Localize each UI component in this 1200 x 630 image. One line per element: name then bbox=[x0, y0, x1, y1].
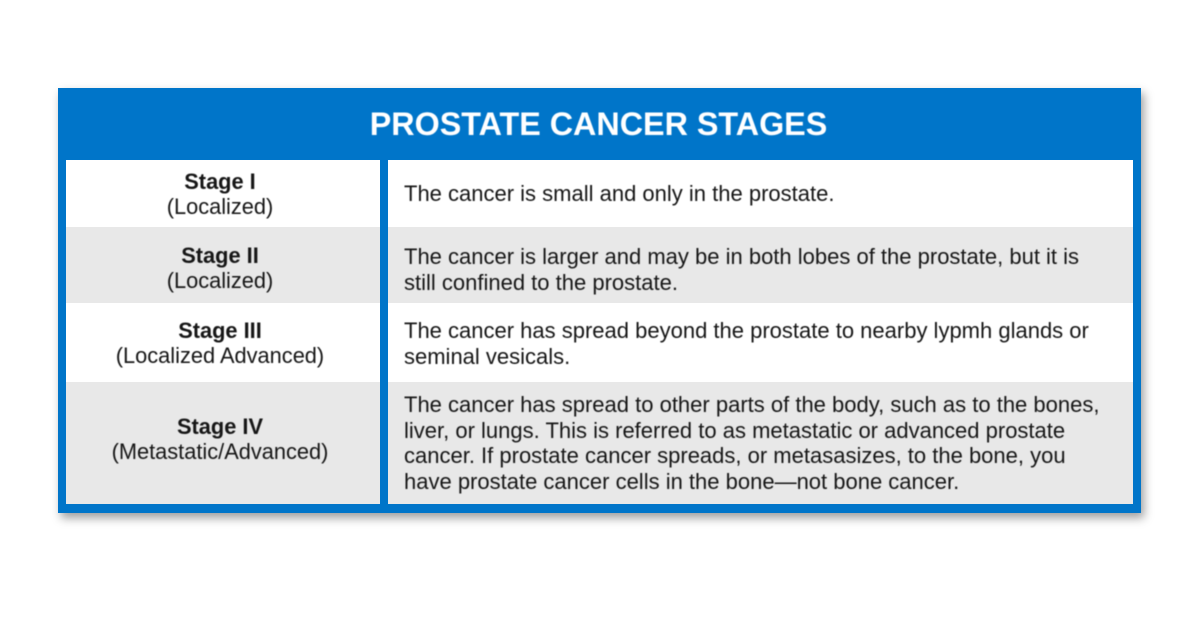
stage IV label: (Metastatic/Advanced) bbox=[112, 439, 328, 464]
stage III description: The cancer has spread beyond the prostate to nearby lypmh glands or bbox=[404, 318, 1089, 343]
stage II label: Stage II bbox=[181, 243, 259, 268]
stage II description: The cancer is larger and may be in both lobes of the prostate, but it is bbox=[404, 244, 1079, 269]
stage II description bbox=[388, 227, 1133, 303]
stage IV description: The cancer has spread to other parts of the body, such as to the bones, bbox=[404, 392, 1099, 417]
stage I label: (Localized) bbox=[167, 194, 273, 219]
stage I description: The cancer is small and only in the prostate. bbox=[404, 181, 834, 206]
stage IV label bbox=[66, 382, 380, 504]
stage II label bbox=[66, 227, 380, 303]
stage I label: Stage I bbox=[184, 169, 256, 194]
stage IV label: Stage IV bbox=[177, 414, 263, 439]
stage II label: (Localized) bbox=[167, 268, 273, 293]
stage IV description: cancer. If prostate cancer spreads, or metasasizes, to the bone, you bbox=[404, 443, 1066, 468]
stage III description: seminal vesicals. bbox=[404, 344, 570, 369]
stage II description: still confined to the prostate. bbox=[404, 270, 678, 295]
title: PROSTATE CANCER STAGES bbox=[370, 106, 827, 142]
stage I label bbox=[66, 160, 380, 227]
stage III label: Stage III bbox=[178, 318, 262, 343]
stage III label bbox=[66, 303, 380, 382]
stage III label: (Localized Advanced) bbox=[116, 343, 324, 368]
stage IV description: have prostate cancer cells in the bone—not bone cancer. bbox=[404, 469, 959, 494]
panel: prostate cancer stages table bbox=[58, 88, 1141, 513]
stage I description bbox=[388, 160, 1133, 227]
stage IV description: liver, or lungs. This is referred to as metastatic or advanced prostate bbox=[404, 418, 1065, 443]
stage IV description bbox=[388, 382, 1133, 504]
stage III description bbox=[388, 303, 1133, 382]
